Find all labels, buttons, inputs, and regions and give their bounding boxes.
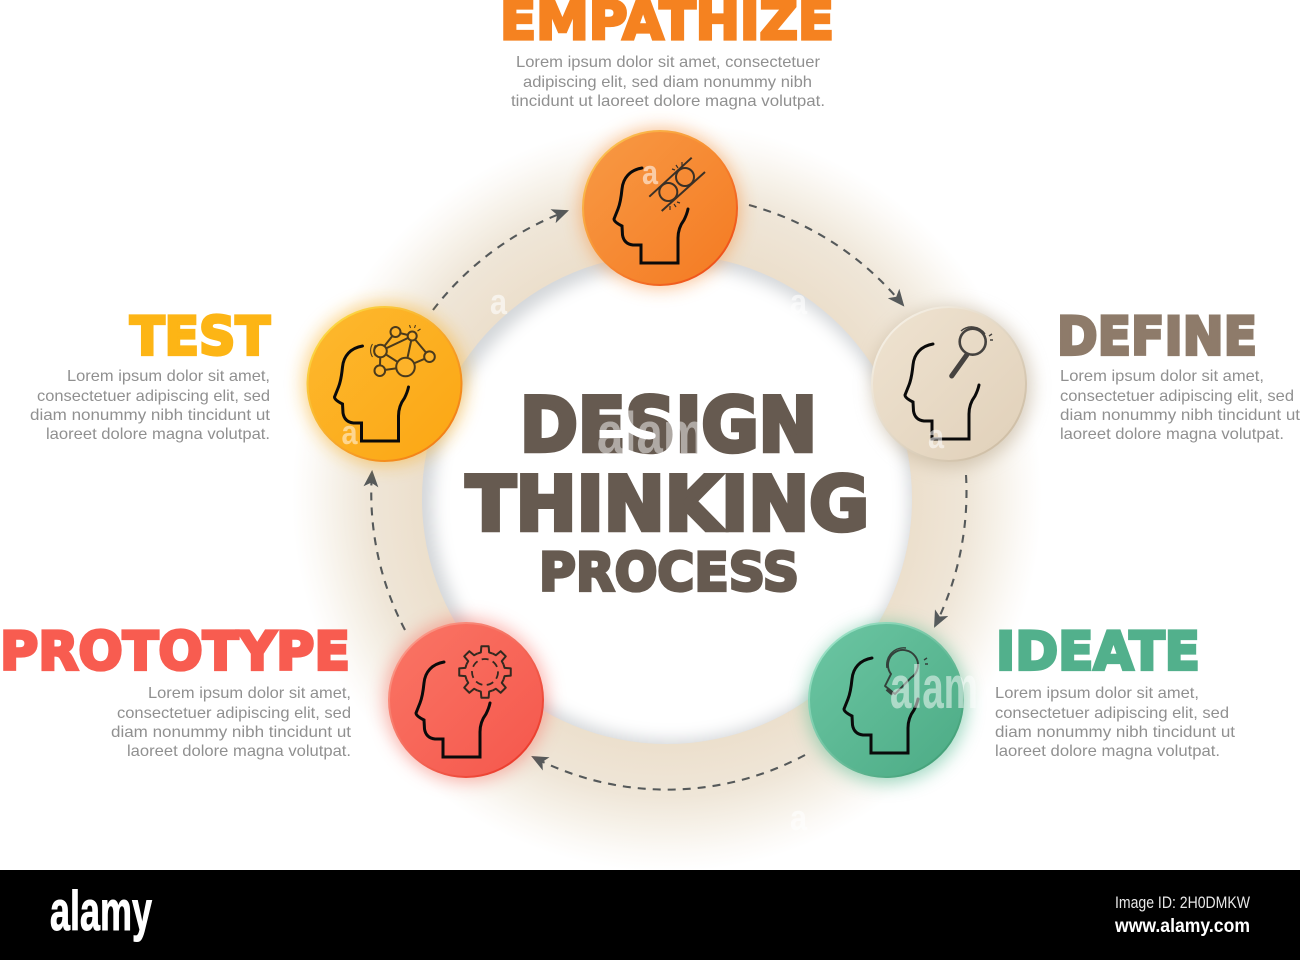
centre title: design thinking process: DESIGN bbox=[520, 381, 817, 469]
heading: define: DEFINE bbox=[1057, 306, 1257, 368]
watermark letters on the ring: a bbox=[790, 797, 808, 838]
watermark letters on the ring: a bbox=[490, 281, 508, 322]
centre title: design thinking process bbox=[466, 381, 869, 604]
text block: test: consectetuer adipiscing elit, sed bbox=[37, 388, 270, 405]
ring: beige cycle band around the centre bbox=[311, 146, 1023, 853]
badge: test head with network icon bbox=[304, 303, 466, 465]
panel: ideate bbox=[807, 622, 1236, 783]
badge: define head with magnifier icon bbox=[872, 307, 1032, 467]
badge: empathize head with chain icon bbox=[580, 128, 740, 288]
text block: empathize: tincidunt ut laoreet dolore magna volutpat. bbox=[511, 93, 825, 110]
panel: prototype bbox=[0, 619, 547, 781]
watermark letters on the ring bbox=[490, 281, 808, 838]
text block: prototype: Lorem ipsum dolor sit amet, bbox=[148, 685, 351, 702]
watermark letters on the ring: a bbox=[790, 281, 808, 322]
text block: define: diam nonummy nibh tincidunt ut bbox=[1060, 407, 1300, 424]
text block: test: laoreet dolore magna volutpat. bbox=[46, 426, 270, 443]
text block: empathize: Lorem ipsum dolor sit amet, consectetuer bbox=[516, 54, 821, 71]
centre title: design thinking process: THINKING bbox=[466, 460, 869, 548]
heading: ideate: IDEATE bbox=[996, 622, 1200, 682]
text block: test bbox=[30, 368, 271, 443]
watermark: ideate: alam bbox=[890, 654, 978, 721]
footer bar bbox=[0, 870, 1300, 960]
heading: test: TEST bbox=[130, 306, 270, 368]
watermark: centre: alam bbox=[597, 401, 705, 466]
text block: ideate: laoreet dolore magna volutpat. bbox=[995, 743, 1220, 760]
text block: test: diam nonummy nibh tincidunt ut bbox=[30, 407, 271, 424]
text block: define: Lorem ipsum dolor sit amet, bbox=[1060, 368, 1264, 385]
text block: empathize: adipiscing elit, sed diam nonummy nibh bbox=[523, 74, 812, 91]
text block: prototype: diam nonummy nibh tincidunt ut bbox=[111, 724, 352, 741]
text block: ideate: Lorem ipsum dolor sit amet, bbox=[995, 685, 1199, 702]
badge: prototype head with gear icon bbox=[385, 619, 547, 781]
text block: test: Lorem ipsum dolor sit amet, bbox=[67, 368, 270, 385]
text block: prototype: laoreet dolore magna volutpat. bbox=[127, 743, 351, 760]
panel: define bbox=[872, 306, 1300, 467]
footer website: www.alamy.com bbox=[1114, 916, 1250, 937]
text block: define: consectetuer adipiscing elit, sed bbox=[1060, 388, 1294, 405]
text block: empathize bbox=[511, 54, 825, 110]
centre title: design thinking process: PROCESS bbox=[539, 542, 799, 604]
heading: prototype: PROTOTYPE bbox=[0, 622, 350, 682]
badge: define head with magnifier icon: a bbox=[928, 418, 945, 456]
text block: define bbox=[1060, 368, 1300, 443]
footer logo: alamy bbox=[50, 879, 152, 942]
dashed cycle arrows bbox=[371, 205, 966, 790]
badge: test head with network icon: a bbox=[342, 414, 358, 452]
badge: empathize head with chain icon: a bbox=[642, 154, 659, 192]
text block: define: laoreet dolore magna volutpat. bbox=[1060, 426, 1284, 443]
text block: ideate: diam nonummy nibh tincidunt ut bbox=[995, 724, 1236, 741]
text block: prototype: consectetuer adipiscing elit, sed bbox=[117, 705, 351, 722]
badge: ideate head with light bulb icon bbox=[807, 623, 967, 783]
text block: ideate: consectetuer adipiscing elit, sed bbox=[995, 705, 1229, 722]
footer image id: Image ID: 2H0DMKW bbox=[1115, 893, 1250, 912]
text block: ideate bbox=[995, 685, 1236, 760]
panel: empathize bbox=[500, 0, 834, 288]
panel: test bbox=[30, 303, 466, 465]
text block: prototype bbox=[111, 685, 352, 760]
